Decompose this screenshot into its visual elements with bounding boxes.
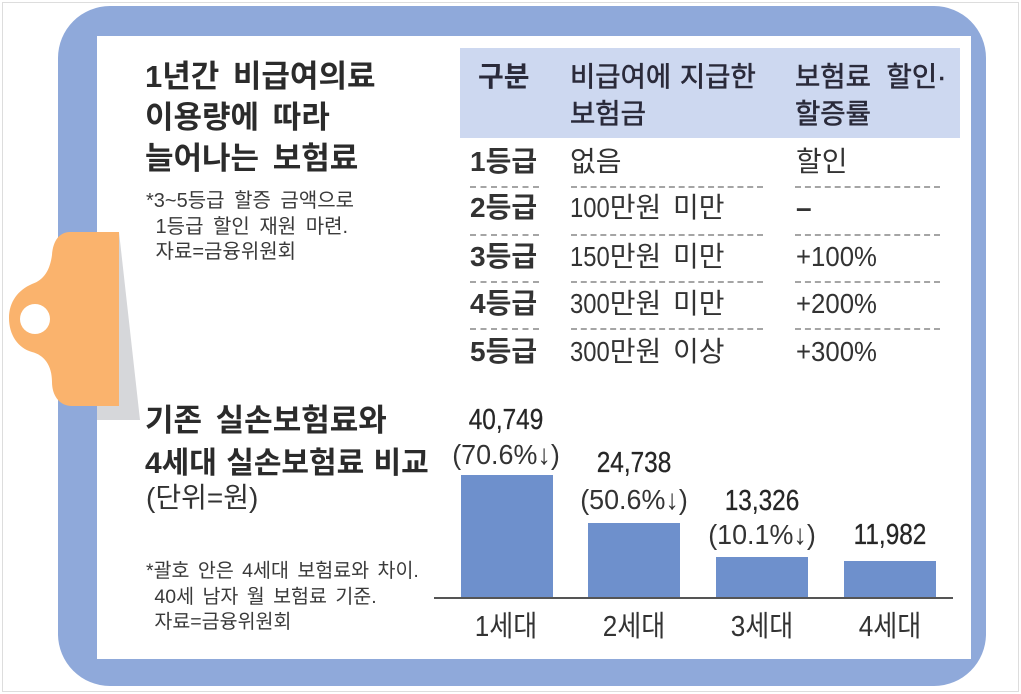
row: grade 5: 5등급 [470, 336, 537, 367]
bar shape 4 [844, 561, 936, 597]
row: grade 3: 만원 미만 [610, 241, 725, 272]
row: grade 5: 만원 이상 [610, 336, 725, 367]
row: grade 4 [470, 288, 877, 319]
bar: generation 2 [580, 447, 688, 643]
axis line [434, 597, 953, 599]
heading: premium by usage: 이용량에 따라 [145, 100, 330, 135]
row: grade 4: 만원 미만 [610, 288, 725, 319]
header: discount rate: 보험료 할인· [795, 61, 946, 92]
row: grade 1: 1등급 [470, 146, 537, 177]
value: generation 4: 11,982 [854, 519, 926, 551]
bar shape 3 [716, 557, 808, 597]
row: grade 5 [470, 336, 877, 367]
bar: generation 4 [844, 519, 936, 643]
clip shadow [97, 233, 140, 420]
heading: premium by usage: 1년간 비급여의료 [145, 59, 376, 94]
note: premium source: 자료=금융위원회 [156, 241, 296, 263]
heading: premium comparison [145, 403, 429, 480]
heading: premium comparison: 4세대 실손보험료 비교 [145, 447, 429, 480]
row: grade 2: 2등급 [470, 192, 537, 223]
row: grade 3: 150 [570, 241, 610, 272]
note: premium source: *3~5등급 할증 금액으로 [146, 190, 354, 212]
table: grades [460, 48, 960, 367]
axis label 3: 3세대 [731, 611, 793, 643]
bar chart [434, 404, 953, 643]
header: category: 구분 [478, 61, 530, 92]
header: paid insurance: 보험금 [570, 98, 646, 129]
header: paid insurance [570, 61, 756, 129]
header: discount rate [795, 61, 946, 129]
paper sheet [97, 36, 971, 659]
value: generation 2: 24,738 [597, 447, 671, 479]
row: grade 3: +100% [796, 241, 877, 272]
row: grade 3 [470, 241, 877, 272]
note: premium source [146, 190, 354, 263]
heading: premium comparison: 기존 실손보험료와 [145, 403, 387, 438]
header: discount rate: 할증률 [795, 98, 871, 129]
row: grade 3: 3등급 [470, 241, 537, 272]
value: generation 3: 13,326 [725, 485, 799, 517]
heading: premium by usage [145, 59, 376, 176]
heading: premium by usage: 늘어나는 보험료 [145, 141, 358, 176]
row: grade 5: 300 [570, 336, 610, 367]
row: grade 2 [470, 192, 812, 223]
icon: orange clip [9, 232, 119, 406]
axis label 4: 4세대 [859, 611, 921, 643]
row: grade 4: 300 [570, 288, 610, 319]
row: grade 1 [470, 146, 848, 177]
axis label 2: 2세대 [603, 611, 665, 643]
change: generation 3: (10.1%↓) [708, 519, 816, 550]
bar shape 1 [461, 475, 553, 597]
axis label 1: 1세대 [475, 611, 537, 643]
value: generation 1: 40,749 [469, 404, 543, 436]
row: grade 1: 없음 [570, 146, 622, 177]
row: grade 4: 4등급 [470, 288, 537, 319]
row: grade 4: +200% [796, 288, 877, 319]
bar: generation 1 [452, 404, 560, 643]
note: comparison source: *괄호 안은 4세대 보험료와 차이. [146, 560, 419, 582]
row: grade 2: – [796, 192, 812, 223]
row: grade 1: 할인 [796, 146, 848, 177]
bar shape 2 [588, 523, 680, 597]
note: comparison source [146, 560, 419, 633]
bar: generation 3 [708, 485, 816, 643]
note: comparison source: 40세 남자 월 보험료 기준. [154, 586, 377, 608]
header: paid insurance: 비급여에 지급한 [570, 61, 756, 92]
change: generation 2: (50.6%↓) [580, 484, 688, 515]
unit label: (단위=원) [146, 482, 258, 513]
note: comparison source: 자료=금융위원회 [154, 611, 291, 633]
row: grade 5: +300% [796, 336, 877, 367]
row: grade 2: 100 [570, 192, 610, 223]
note: premium source: 1등급 할인 재원 마련. [156, 216, 348, 238]
change: generation 1: (70.6%↓) [452, 439, 560, 470]
row: grade 2: 만원 미만 [610, 192, 725, 223]
table header background [460, 48, 960, 138]
